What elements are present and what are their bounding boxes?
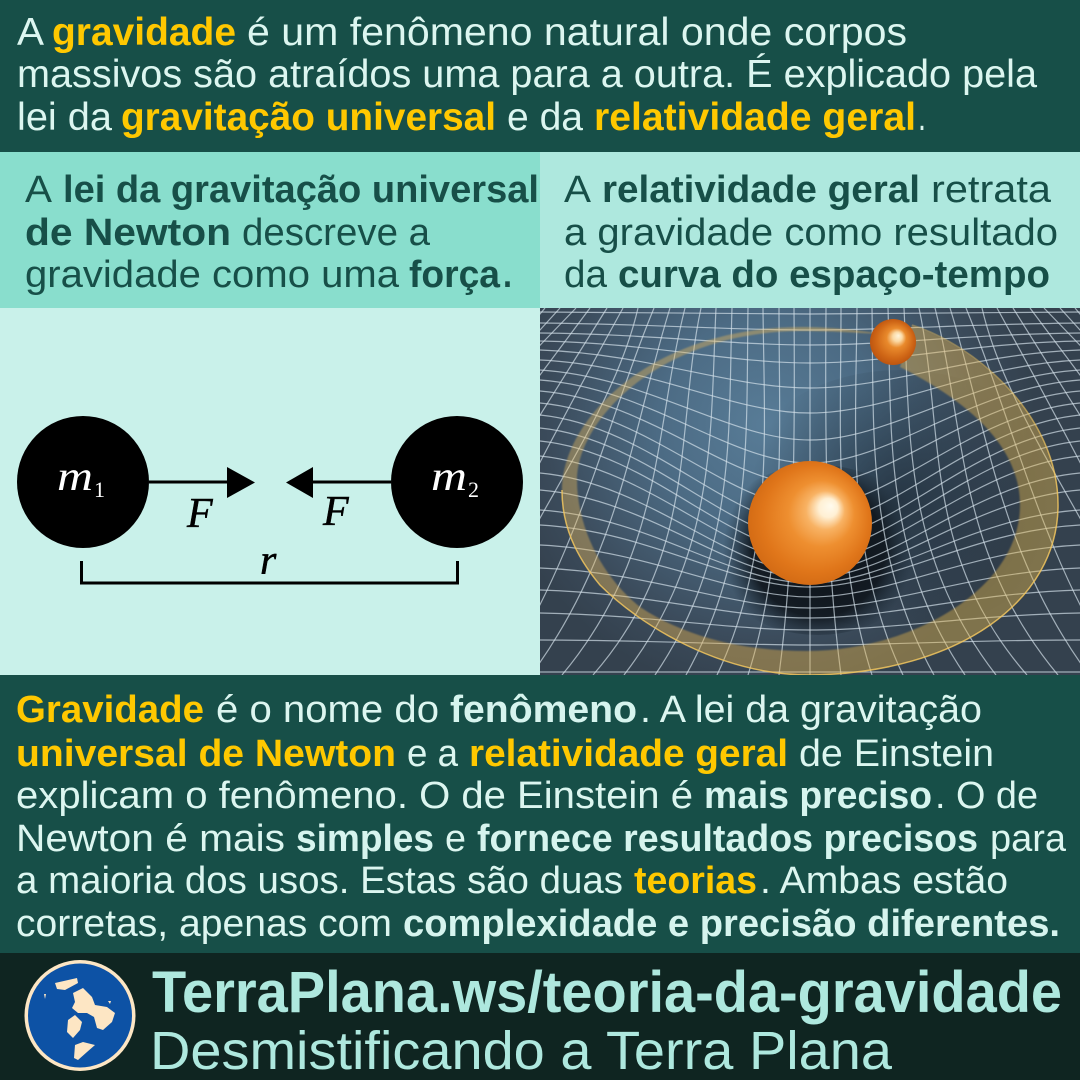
Newton text: de Newton — [25, 212, 231, 254]
shadow on the far side of the well — [770, 374, 996, 604]
relativity text: a gravidade como resultado — [564, 212, 1058, 254]
relativity text: relatividade geral — [602, 169, 920, 211]
intro text: gravitação universal — [121, 96, 496, 139]
panel: Newton force diagram — [0, 308, 540, 675]
intro text: . — [918, 96, 926, 139]
spacetime grid — [540, 308, 1080, 675]
panel: footer — [0, 953, 1080, 1080]
panel: explanation — [0, 675, 1080, 953]
Newton text: força — [409, 254, 501, 296]
panel: intro header — [0, 0, 1080, 152]
Newton text: gravidade como uma — [25, 254, 400, 296]
intro text: gravidade — [52, 11, 236, 54]
relativity text: da — [564, 254, 608, 296]
relativity text: retrata — [931, 169, 1052, 211]
label F right: F — [322, 489, 349, 535]
Newton text — [25, 169, 539, 296]
explanation text: relatividade geral — [469, 733, 788, 775]
mass m2: m — [431, 454, 467, 500]
arrow: force on m2 — [286, 467, 391, 498]
small sphere — [870, 319, 916, 365]
intro text: lei da — [17, 96, 112, 139]
intro text: A — [17, 11, 44, 54]
explanation text: . O de — [935, 775, 1038, 817]
explanation text: universal de Newton — [16, 733, 396, 775]
icon: flat earth globe — [24, 960, 136, 1071]
explanation text: é o nome do — [216, 689, 439, 731]
Newton text: A — [25, 169, 53, 211]
panel: curved spacetime illustration — [540, 308, 1080, 675]
intro text — [17, 11, 1037, 139]
explanation text: e a — [407, 733, 459, 775]
explanation text: . A lei da gravitação — [640, 689, 982, 731]
explanation text: fenômeno — [450, 689, 637, 731]
explanation text: complexidade e precisão diferentes. — [403, 903, 1060, 945]
label r: r — [260, 538, 277, 584]
explanation text: teorias — [634, 860, 757, 902]
explanation text: explicam o fenômeno. O de Einstein é — [16, 775, 693, 817]
large sphere — [748, 461, 872, 585]
intro text: relatividade geral — [594, 96, 916, 139]
explanation text — [16, 689, 1067, 945]
website address: TerraPlana.ws/teoria-da-gravidade — [152, 960, 1062, 1025]
explanation text: simples — [296, 818, 434, 860]
explanation text: . Ambas estão — [760, 860, 1008, 902]
explanation text: de Einstein — [799, 733, 994, 775]
mass m2 — [391, 416, 523, 548]
mass m2: 2 — [468, 477, 479, 502]
panel: Newton heading — [0, 152, 540, 308]
intro text: massivos são atraídos uma para a outra. É explicado pela — [17, 53, 1037, 96]
arrow: force on m1 — [149, 467, 255, 498]
label F left: F — [186, 491, 213, 537]
Newton text: lei da gravitação universal — [63, 169, 539, 211]
explanation text: mais preciso — [704, 775, 932, 817]
explanation text: para — [990, 818, 1067, 860]
Newton text: descreve a — [242, 212, 431, 254]
distance bracket — [82, 561, 458, 583]
mass m1 — [17, 416, 149, 548]
tagline: Desmistificando a Terra Plana — [150, 1021, 893, 1080]
shadow well — [726, 466, 904, 635]
relativity text: curva do espaço-tempo — [618, 254, 1050, 296]
panel: relativity heading — [540, 152, 1080, 308]
explanation text: Gravidade — [16, 689, 204, 731]
mass m1: m — [57, 454, 93, 500]
intro text: é um fenômeno natural onde corpos — [247, 11, 907, 54]
intro text: e da — [507, 96, 583, 139]
explanation text: e — [445, 818, 466, 860]
floor background — [540, 308, 1080, 675]
relativity text: A — [564, 169, 592, 211]
explanation text: fornece resultados precisos — [477, 818, 978, 860]
explanation text: corretas, apenas com — [16, 903, 392, 945]
Newton text: . — [503, 254, 512, 296]
orbit ring — [562, 325, 1058, 675]
explanation text: a maioria dos usos. Estas são duas — [16, 860, 623, 902]
mass m1: 1 — [94, 477, 105, 502]
explanation text: Newton é mais — [16, 818, 285, 860]
relativity text — [564, 169, 1058, 296]
